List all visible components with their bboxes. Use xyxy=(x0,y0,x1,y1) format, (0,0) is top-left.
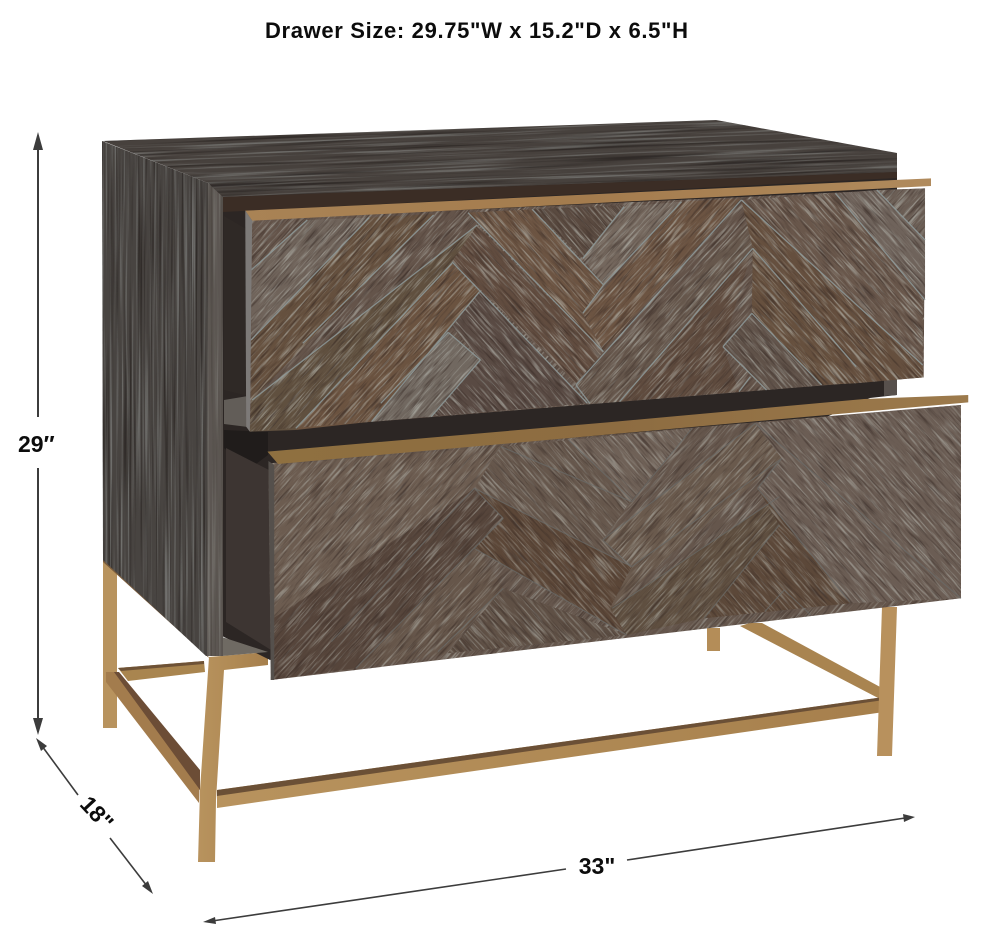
furniture: two-drawer chest xyxy=(102,120,968,862)
cabinet front interior xyxy=(208,155,897,660)
lower drawer xyxy=(267,395,968,680)
cabinet lower edge strip xyxy=(222,637,268,656)
upper drawer brass handle xyxy=(245,178,931,432)
height dimension arrow xyxy=(33,132,43,735)
brass base frame xyxy=(103,556,897,862)
lower drawer brass handle xyxy=(267,395,968,680)
lower drawer seams xyxy=(331,423,961,668)
lower drawer box interior xyxy=(224,430,268,470)
lower drawer herringbone front xyxy=(268,405,961,680)
upper drawer herringbone front xyxy=(246,188,925,432)
cabinet right edge post xyxy=(884,376,897,396)
height label: 29″ xyxy=(18,431,55,457)
lower drawer box side xyxy=(226,448,271,650)
upper drawer xyxy=(245,178,931,432)
width label: 33" xyxy=(579,853,615,879)
cabinet left side panel xyxy=(102,141,223,656)
title: Drawer Size: 29.75"W x 15.2"D x 6.5"H xyxy=(265,18,688,43)
upper drawer box side xyxy=(224,216,248,396)
shelf between drawers xyxy=(224,396,248,427)
upper drawer seams xyxy=(251,190,925,428)
cabinet top face xyxy=(103,120,897,212)
depth dimension arrow xyxy=(36,738,153,894)
depth label: 18" xyxy=(75,791,119,835)
width dimension arrow xyxy=(203,814,915,924)
